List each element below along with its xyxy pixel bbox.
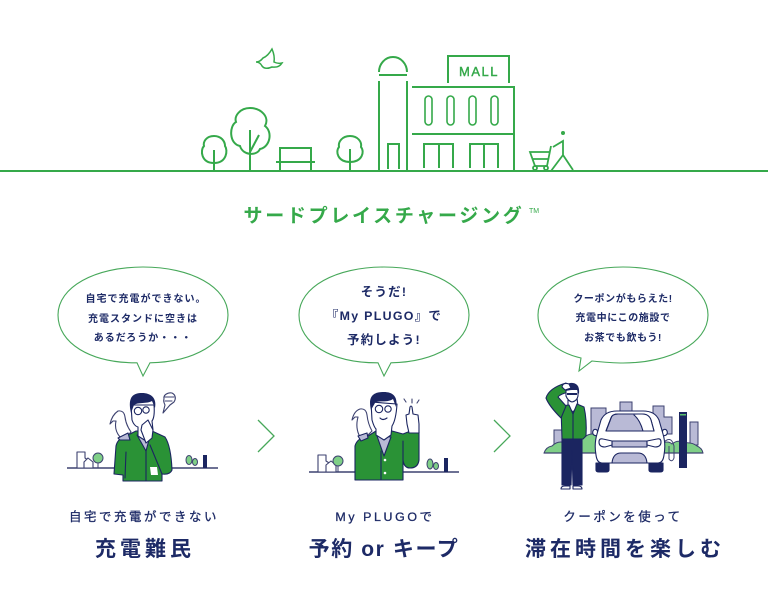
- ground line: [0, 170, 768, 172]
- speech bubble 1: あるだろうか・・・: [94, 332, 192, 344]
- caption 2: 予約 or キープ: [309, 538, 459, 561]
- speech bubble 2: 『My PLUGO』で: [326, 309, 442, 323]
- title: サードプレイスチャージング: [244, 204, 524, 227]
- speech bubble 1: 充電スタンドに空きは: [88, 312, 198, 325]
- illustration: man with car and charger: [544, 383, 703, 489]
- caption 2: My PLUGOで: [335, 510, 435, 524]
- icon: silo tower: [379, 57, 407, 171]
- caption 3: クーポンを使って: [563, 509, 683, 524]
- speech bubble 2: [299, 267, 469, 376]
- icon: bench: [276, 148, 315, 171]
- icon: large tree: [231, 108, 270, 171]
- speech bubble 1: 自宅で充電ができない。: [86, 292, 206, 305]
- caption 2: [309, 510, 459, 561]
- speech bubble 1: [58, 267, 228, 376]
- caption 1: 充電難民: [95, 538, 195, 561]
- speech bubble 3: 充電中にこの施設で: [575, 311, 671, 324]
- speech bubble 3: お茶でも飲もう!: [584, 331, 662, 344]
- illustration: worried man: [67, 393, 218, 481]
- speech bubble 3: クーポンがもらえた!: [573, 292, 673, 305]
- illustration: man with idea: [309, 392, 459, 480]
- icon: bird: [256, 49, 282, 68]
- icon: person with shopping cart: [530, 131, 573, 171]
- icon: small tree right: [337, 136, 363, 171]
- icon: small tree left: [202, 136, 226, 171]
- caption 3: 滞在時間を楽しむ: [525, 538, 725, 561]
- speech bubble 2: そうだ!: [361, 285, 407, 299]
- caption 3: [525, 509, 725, 561]
- caption 1: [69, 509, 219, 561]
- bird on shoulder: [352, 409, 372, 437]
- mall sign text: MALL: [459, 64, 499, 79]
- speech bubble 3: [538, 267, 708, 371]
- arrow 1: [258, 420, 274, 452]
- trademark: TM: [529, 208, 539, 215]
- icon: mall building: [412, 56, 514, 171]
- caption 1: 自宅で充電ができない: [69, 509, 219, 524]
- bird on shoulder: [110, 411, 131, 437]
- speech bubble 2: 予約しよう!: [347, 332, 421, 347]
- arrow 2: [494, 420, 510, 452]
